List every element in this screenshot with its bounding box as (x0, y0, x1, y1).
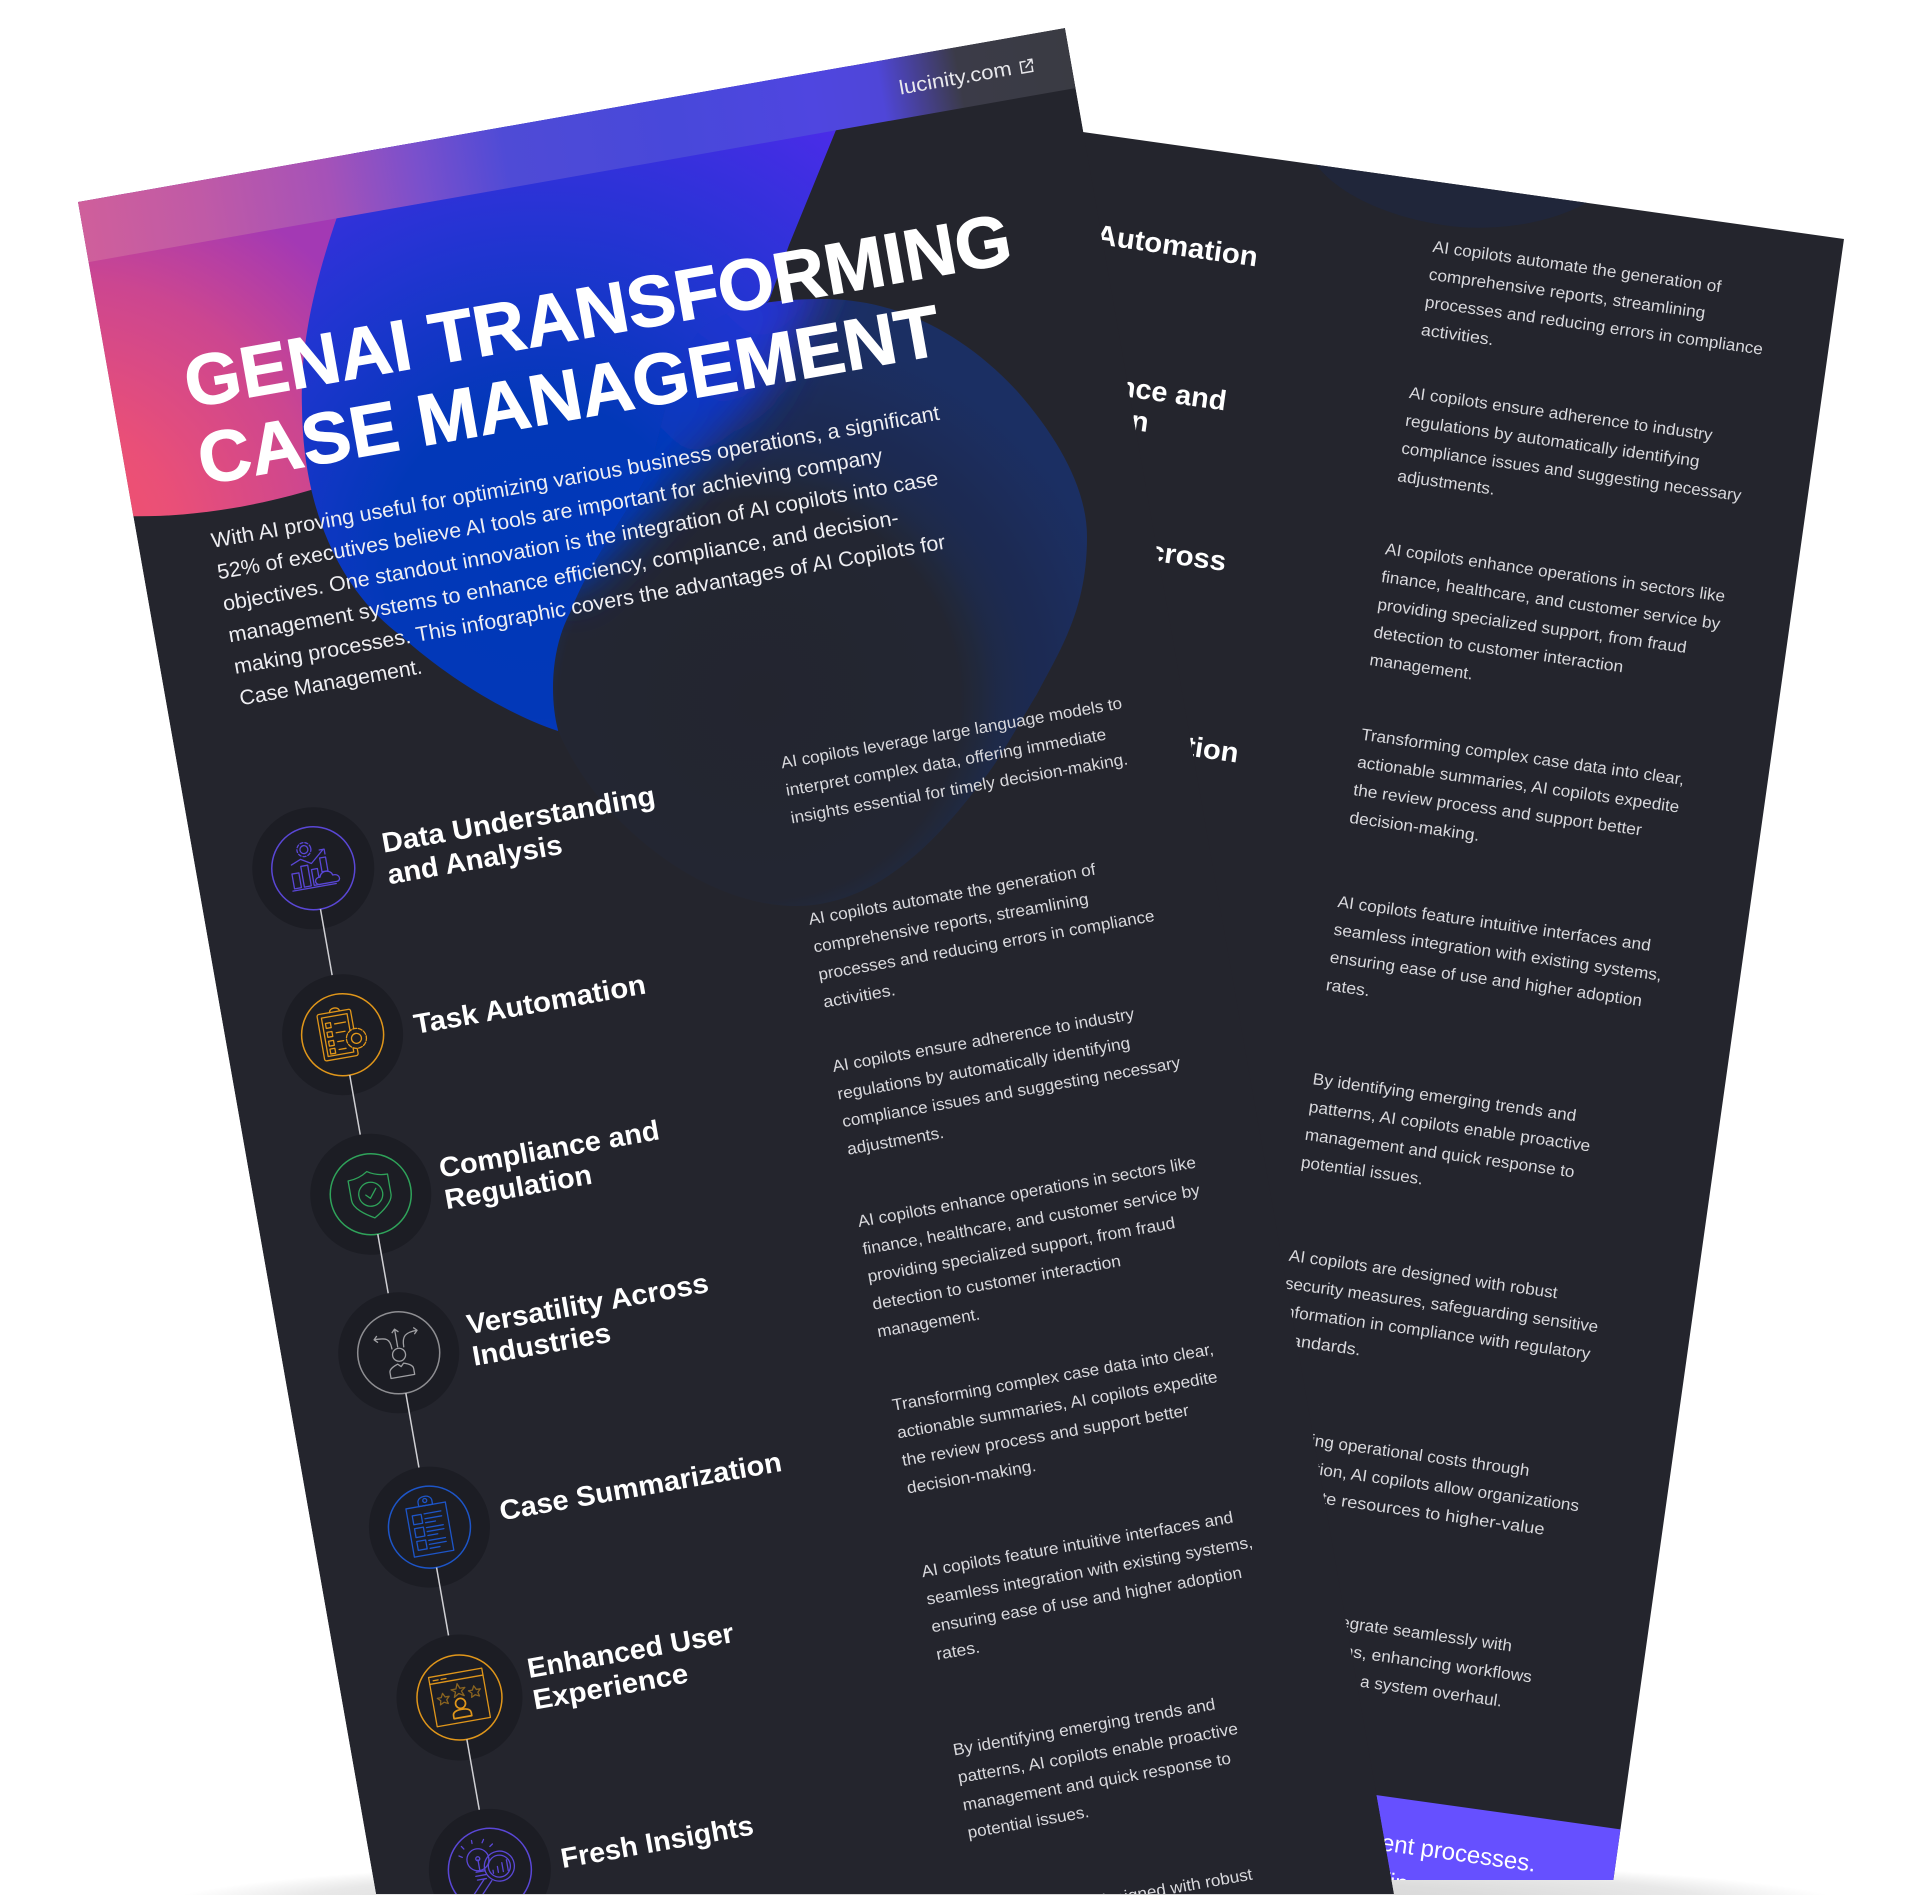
back description: security: standards. (1276, 1330, 1362, 1359)
back description: reports: activities. (1420, 321, 1495, 349)
description: adjustments. (846, 1124, 945, 1159)
icon: bulb with magnifier (457, 1834, 519, 1895)
heading: Task Automation (411, 969, 648, 1040)
back description: compliance: adjustments. (1396, 467, 1496, 499)
icon: charts, gear and cloud (290, 842, 340, 892)
back sheet faint blob (1316, 164, 1586, 228)
back description: reports: processes and reducing errors in compliance (1424, 293, 1764, 359)
back description: costs (1313, 1434, 1578, 1534)
back description: interfaces: ensuring ease of use and higher adoption (1329, 949, 1643, 1010)
description: AI copilots enhance operations in sectors like (856, 1154, 1197, 1231)
back description: sectors: detection to customer interaction (1372, 623, 1624, 676)
back description: interfaces (1326, 896, 1660, 1006)
description: insights essential for timely decision-making. (789, 750, 1129, 827)
description: regulations by automatically identifying (836, 1034, 1132, 1104)
icon: browser with stars and user (429, 1668, 490, 1727)
front sheet background (78, 28, 1394, 1894)
description: providing specialized support, from fraud (866, 1214, 1177, 1286)
item: case summarization (359, 1457, 500, 1597)
icon: clipboard with gear (316, 1003, 369, 1061)
description: ensuring ease of use and higher adoption (930, 1564, 1243, 1636)
back description: sectors: providing specialized support, from fraud (1376, 596, 1688, 657)
description: AI copilots leverage large language models to (780, 694, 1123, 772)
intro paragraph: With AI proving useful for optimizing various business operations, a significant (209, 402, 941, 553)
back description: reports (1422, 241, 1762, 354)
back sheet background (1083, 132, 1844, 1880)
purple conclusion banner (1376, 1795, 1620, 1880)
description (834, 1010, 1180, 1155)
site link: lucinity.com (897, 58, 1013, 99)
description: activities. (822, 981, 897, 1012)
description: management and quick response to (961, 1750, 1232, 1815)
back description: compliance: AI copilots ensure adherence to industry (1408, 384, 1714, 445)
intro paragraph: Case Management. (238, 656, 424, 710)
purple conclusion banner: AI copilots are transforming case management processes. (921, 1765, 1538, 1878)
icon: shield with check (348, 1170, 392, 1218)
description: finance, healthcare, and customer service by (861, 1181, 1202, 1258)
heading (440, 1119, 659, 1209)
heading: Enhanced User (525, 1617, 736, 1684)
item: data understanding (252, 808, 374, 929)
description: By identifying emerging trends and (952, 1695, 1217, 1759)
back sheet document content (1101, 226, 1762, 1880)
heading (464, 1267, 716, 1372)
back description: summaries: decision-making. (1348, 809, 1481, 845)
title: CASE MANAGEMENT (192, 291, 946, 500)
description: interpret complex data, offering immediate (784, 726, 1108, 800)
intro paragraph (209, 402, 969, 710)
back description: interfaces: AI copilots feature intuitive interfaces and (1337, 893, 1652, 955)
description: processes and reducing errors in compliance (817, 907, 1156, 984)
back description: compliance: regulations by automatically identifying (1404, 412, 1701, 471)
intro paragraph: making processes. This infographic covers the advantages of AI Copilots for (232, 531, 947, 679)
panel: front sheet (40, 28, 1394, 1895)
back headings: Compliance and (1003, 355, 1229, 416)
description: Transforming complex case data into clear, (891, 1340, 1215, 1415)
back description: integration: without requiring a system overhaul. (1229, 1655, 1503, 1711)
heading (525, 1617, 742, 1716)
soft blue fade over navy blob (540, 270, 830, 600)
back description: summaries: actionable summaries, AI copilots expedite (1356, 753, 1680, 816)
description (780, 694, 1133, 827)
back headings: Regulation (999, 386, 1151, 438)
heading: Data Understanding (379, 780, 657, 859)
back description: compliance (1398, 387, 1742, 504)
back description: trends (1301, 1073, 1590, 1184)
panel: back sheet (1083, 132, 1844, 1880)
description: potential issues. (966, 1803, 1090, 1842)
back description: reports: comprehensive reports, streamlining (1428, 266, 1707, 322)
item: fresh insights (419, 1799, 561, 1895)
back description: trends: By identifying emerging trends and (1312, 1070, 1578, 1125)
back description: costs: to allocate resources to higher-value (1253, 1480, 1546, 1539)
intro paragraph: 52% of executives believe AI tools are important for achieving company (216, 444, 885, 584)
item: compliance (310, 1134, 431, 1254)
back description: summaries (1350, 728, 1682, 844)
back description: interfaces: seamless integration with existing systems, (1333, 921, 1663, 985)
description: compliance issues and suggesting necessary (841, 1054, 1183, 1131)
ground shadow (150, 1850, 1870, 1895)
description (920, 1506, 1264, 1664)
back description: integration (1346, 1619, 1532, 1706)
back headings: Versatility Across (981, 512, 1228, 577)
description: AI copilots automate the generation of (807, 861, 1097, 929)
back description: security: AI copilots are designed with robust (1288, 1247, 1559, 1302)
heading: Regulation (442, 1159, 594, 1215)
item: task automation (282, 974, 403, 1095)
back headings (1101, 226, 1256, 762)
heading: Fresh Insights (558, 1810, 756, 1874)
back headings: Task Automation (1023, 209, 1260, 272)
top browser strip (78, 28, 1075, 262)
description: AI copilots feature intuitive interfaces and (920, 1509, 1235, 1581)
back headings: Industries (977, 544, 1120, 594)
back description: costs: automation, AI copilots allow organizations (1257, 1452, 1580, 1515)
heading: Compliance and (437, 1114, 662, 1184)
description (856, 1154, 1217, 1341)
item: versatility (338, 1292, 459, 1413)
back description: security: information in compliance with regulatory (1280, 1302, 1592, 1364)
description: comprehensive reports, streamlining (812, 890, 1090, 956)
navy gradient blob (553, 299, 1087, 906)
back description: security: security measures, safeguarding sensitive (1284, 1274, 1599, 1336)
description: rates. (935, 1639, 981, 1664)
back description: summaries: Transforming complex case data into clear, (1360, 726, 1685, 789)
heading: Case Summarization (497, 1446, 784, 1526)
back description: costs: tasks. (1249, 1508, 1299, 1532)
back description: integration: AI copilots integrate seamlessly with (1238, 1599, 1513, 1655)
back description: sectors: management. (1368, 651, 1474, 683)
back description: sectors: finance, healthcare, and customer service by (1380, 568, 1722, 634)
heading: Versatility Across (464, 1267, 711, 1340)
description: seamless integration with existing systems, (925, 1534, 1254, 1609)
description: the review process and support better (901, 1402, 1191, 1470)
description: detection to customer interaction (871, 1252, 1122, 1314)
heading: Industries (470, 1317, 613, 1372)
intro paragraph: objectives. One standout innovation is the integration of AI copilots into case (221, 467, 940, 616)
back description: trends: potential issues. (1300, 1154, 1424, 1188)
timeline connectors (320, 909, 479, 1810)
description (810, 862, 1154, 1008)
icon: external link (1020, 59, 1034, 73)
back description: security (1286, 1250, 1598, 1362)
icon: person with branching arrows (373, 1327, 418, 1380)
heading: Experience (530, 1658, 690, 1716)
back description: compliance: compliance issues and suggesting necessary (1400, 440, 1743, 505)
heading: and Analysis (385, 829, 565, 890)
blue gradient blob (302, 60, 850, 731)
description (891, 1340, 1230, 1497)
back description: trends: management and quick response to (1304, 1126, 1576, 1181)
back description: trends: patterns, AI copilots enable proactive (1308, 1098, 1591, 1155)
back description: summaries: the review process and support better (1352, 781, 1643, 840)
description: AI copilots ensure adherence to industry (831, 1005, 1136, 1076)
heading (382, 790, 654, 884)
back description: reports: AI copilots automate the generation of (1432, 238, 1723, 296)
back description: interfaces: rates. (1325, 976, 1371, 1000)
description: decision-making. (905, 1457, 1038, 1497)
description: management. (876, 1305, 981, 1341)
pink gradient blob (78, 144, 409, 516)
description: patterns, AI copilots enable proactive (956, 1720, 1239, 1787)
description (952, 1692, 1249, 1842)
back description: sectors (1370, 544, 1724, 680)
intro paragraph: management systems to enhance efficiency, compliance, and decision- (227, 507, 900, 647)
back description: costs: Reducing operational costs through (1261, 1425, 1531, 1480)
description: actionable summaries, AI copilots expedite (896, 1368, 1219, 1442)
title: GENAI TRANSFORMING (178, 199, 1017, 424)
back description: integration: existing systems, enhancing workflows (1234, 1627, 1533, 1686)
icon: clipboard list (404, 1493, 454, 1557)
back headings: Case Summarization (953, 698, 1241, 769)
item: enhanced user experience (386, 1624, 532, 1770)
back description: sectors: AI copilots enhance operations in sectors like (1384, 540, 1726, 606)
